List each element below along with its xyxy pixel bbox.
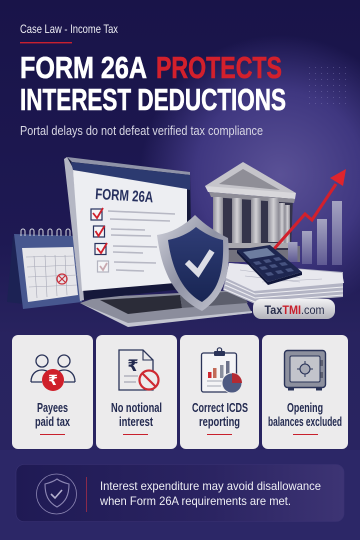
bar chart (288, 201, 342, 265)
eyebrow rule (20, 42, 72, 43)
card: correct ICDS reporting (180, 335, 259, 449)
callout panel (16, 464, 344, 522)
callout text: Interest expenditure may avoid disallowance (100, 479, 321, 493)
bank building (205, 162, 300, 262)
header (20, 22, 286, 138)
title: PROTECTS (156, 51, 282, 85)
card label: No notional (111, 401, 162, 415)
card label (111, 401, 162, 429)
brand pill (253, 299, 335, 319)
card label: Payees (37, 401, 68, 415)
icon: safe (284, 350, 326, 390)
callout text: when Form 26A requirements are met. (99, 494, 291, 508)
form heading: FORM 26A (95, 186, 154, 206)
laptop (64, 157, 252, 327)
laptop base (80, 290, 252, 327)
title (20, 51, 286, 117)
check mark (187, 251, 212, 273)
card label (192, 401, 248, 429)
icon: payees: ₹ (48, 373, 58, 389)
eyebrow label: Case Law - Income Tax (20, 22, 118, 36)
card label (268, 401, 342, 429)
trend arrow (274, 169, 346, 249)
checklist (91, 208, 175, 272)
card: opening balances excluded (262, 335, 348, 449)
card label (35, 401, 70, 429)
brand pill: TaxTMI.com (264, 305, 324, 317)
card: no notional interest (96, 335, 177, 449)
card label: interest (119, 415, 154, 429)
card: payees paid tax (12, 335, 93, 449)
card label: paid tax (35, 415, 70, 429)
subtitle: Portal delays do not defeat verified tax compliance (20, 124, 263, 138)
card label: reporting (199, 415, 240, 429)
icon: document with prohibition: ₹ (127, 356, 139, 375)
icon: clipboard with chart (202, 348, 242, 393)
paper stack (223, 263, 344, 304)
title: FORM 26A (20, 51, 147, 85)
card label: Correct ICDS (192, 401, 248, 415)
callout text (99, 479, 321, 508)
calendar icon (7, 229, 82, 309)
card label: Opening (287, 401, 323, 415)
laptop screen (64, 157, 192, 301)
calculator (237, 245, 302, 285)
icon: shield badge (36, 474, 76, 514)
shield (157, 215, 229, 311)
